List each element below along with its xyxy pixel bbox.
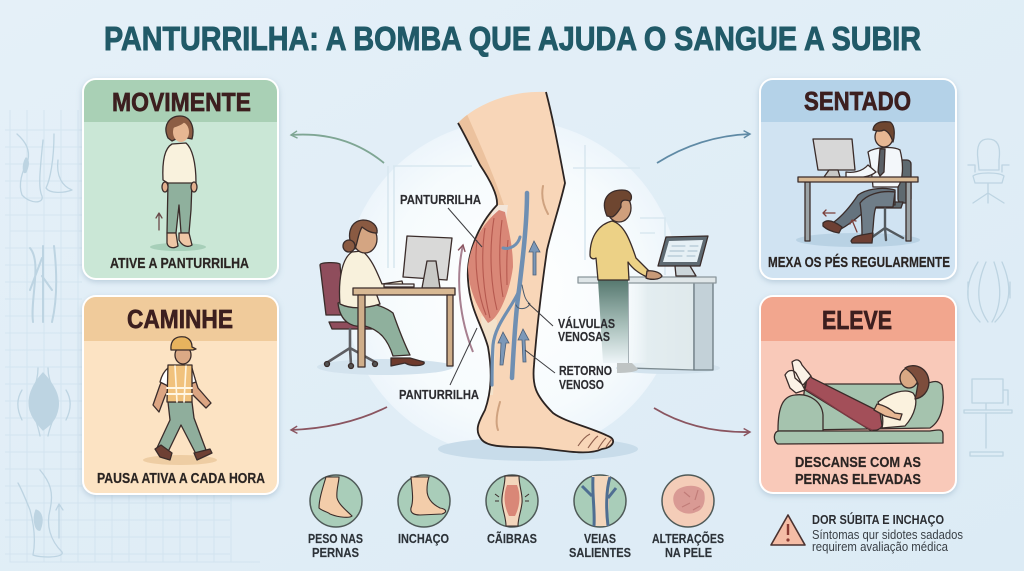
- figure: standing woman: [150, 116, 206, 251]
- decoration: right chair, veins and monitor sketches: [964, 139, 1012, 456]
- label: VÁLVULAS VENOSAS: VENOSAS: [558, 330, 610, 344]
- vein arrows: [498, 241, 540, 365]
- heading: MOVIMENTE: [112, 87, 251, 117]
- figure: man at counter: [578, 190, 720, 374]
- caption: ATIVE A PANTURRILHA: [110, 256, 249, 272]
- calf muscle: [468, 210, 513, 323]
- arrow: to Caminhe: [291, 407, 387, 430]
- arrow: to Eleve: [654, 408, 750, 432]
- figure: walking worker: [143, 337, 217, 465]
- icon: warning triangle: [771, 515, 805, 545]
- figure: reclining woman on sofa: [774, 360, 943, 444]
- leg outline: [458, 92, 613, 452]
- label: RETORNO VENOSO: [525, 350, 612, 392]
- panel: ELEVE: [759, 295, 957, 494]
- toes: [578, 434, 612, 449]
- title: PANTURRILHA: A BOMBA QUE AJUDA O SANGUE A SUBIR: [104, 20, 921, 57]
- label: INCHAÇO: [398, 531, 449, 546]
- arrow: to Movimente: [291, 135, 384, 163]
- label: RETORNO VENOSO: VENOSO: [559, 378, 604, 392]
- panel: CAMINHE: [82, 295, 279, 495]
- symptom: VEIAS SALIENTES: [569, 475, 631, 560]
- callout: warning: [771, 512, 963, 554]
- label: PESO NAS: [308, 531, 363, 546]
- symptom: ALTERAÇÕES NA PELE: [652, 475, 724, 560]
- label: PERNAS: [312, 545, 359, 560]
- callout: warning: requirem avaliação médica: [812, 540, 948, 554]
- label: PANTURRILHA bottom: [399, 328, 479, 402]
- callout: warning: Síntomas qur sidotes sadados: [812, 528, 963, 542]
- label: SALIENTES: [569, 545, 631, 560]
- caption: PAUSA ATIVA A CADA HORA: [97, 471, 265, 487]
- heading: CAMINHE: [127, 304, 233, 334]
- decoration: window frames in the circle: [388, 145, 665, 275]
- label: ALTERAÇÕES: [652, 531, 724, 546]
- panel: SENTADO: [759, 78, 957, 280]
- caption: MEXA OS PÉS REGULARMENTE: [768, 254, 950, 271]
- label: RETORNO VENOSO: RETORNO: [559, 364, 612, 378]
- arrow: to Sentado: [657, 134, 750, 163]
- label: NA PELE: [665, 545, 712, 560]
- figure: woman at desk: [317, 220, 455, 375]
- leg shading: [458, 115, 508, 395]
- caption: DESCANSE COM AS: [795, 455, 921, 471]
- label: VEIAS: [584, 531, 616, 546]
- heading: ELEVE: [822, 305, 892, 335]
- heading: SENTADO: [804, 86, 911, 116]
- veins: [492, 193, 530, 385]
- symptom: CÃIBRAS: [486, 475, 538, 546]
- callout: warning: DOR SÚBITA E INCHAÇO: [812, 512, 944, 527]
- panel: ELEVE: PERNAS ELEVADAS: [795, 472, 921, 488]
- label: PANTURRILHA top: PANTURRILHA: [400, 193, 481, 207]
- arrow: maroon upward flow beside calf: [459, 245, 473, 352]
- decoration: left leg sketches: [17, 134, 72, 557]
- label: [652, 531, 724, 560]
- illustration: leg with calf muscle and veins: [438, 92, 638, 461]
- panel: MOVIMENTE: [82, 78, 279, 280]
- label: CÃIBRAS: [487, 531, 537, 546]
- label: PANTURRILHA bottom: PANTURRILHA: [399, 388, 479, 402]
- label: [569, 531, 631, 560]
- central circle background: [344, 120, 680, 456]
- label: VÁLVULAS VENOSAS: [528, 303, 615, 344]
- label: [308, 531, 363, 560]
- symptom: INCHAÇO: [398, 475, 450, 546]
- label: PANTURRILHA top: [400, 193, 482, 247]
- figure: seated man at desk: [796, 122, 920, 247]
- label: VÁLVULAS VENOSAS: VÁLVULAS: [558, 316, 615, 331]
- symptom: PESO NAS PERNAS: [308, 475, 363, 560]
